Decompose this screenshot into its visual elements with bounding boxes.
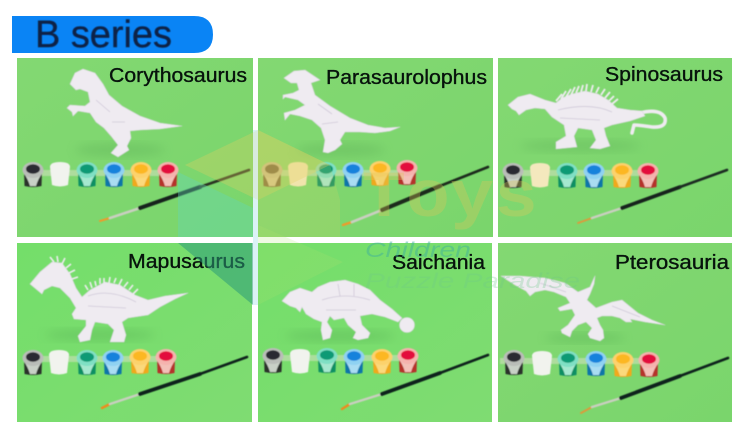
watermark text: Toys: Toys: [362, 161, 538, 236]
header banner: [12, 14, 213, 56]
paint pots: [502, 163, 658, 188]
paint pots: [500, 350, 660, 377]
panel: Parasaurolophus: [258, 58, 493, 237]
label: Saichania: Saichania: [392, 252, 486, 274]
paint pots: [22, 349, 176, 375]
dinosaur figure: Corythosaurus: [67, 69, 182, 157]
label: Corythosaurus: Corythosaurus: [109, 65, 247, 87]
paint pots: [262, 348, 418, 374]
paint brush: [342, 355, 488, 409]
panel: Spinosaurus: [498, 58, 732, 237]
paint pots: [262, 160, 418, 187]
paint brush: [100, 170, 249, 221]
dinosaur figure: Pterosauria: [501, 276, 665, 341]
watermark cube: [178, 130, 343, 305]
watermark text: Children: Children: [365, 239, 471, 262]
dinosaur figure: Parasaurolophus: [283, 70, 400, 153]
dinosaur figure: Mapusaurus: [30, 256, 188, 342]
paint brush: [343, 167, 488, 225]
label: Spinosaurus: Spinosaurus: [605, 64, 723, 86]
panel: Pterosauria: [498, 243, 732, 422]
panel: Saichania: [258, 243, 492, 422]
label: Parasaurolophus: Parasaurolophus: [326, 67, 487, 89]
label: Pterosauria: Pterosauria: [615, 252, 730, 274]
dinosaur figure: Saichania: [282, 280, 414, 340]
panel: Corythosaurus: [17, 58, 253, 237]
paint brush: [102, 357, 247, 408]
paint brush: [578, 170, 727, 223]
dinosaur figure: Spinosaurus: [508, 84, 665, 149]
paint brush: [581, 358, 728, 413]
heading: B series: B series: [35, 14, 172, 56]
panel: Mapusaurus: [17, 243, 252, 422]
watermark: toys logo: [178, 130, 580, 305]
paint pots: [22, 162, 178, 187]
label: Mapusaurus: Mapusaurus: [128, 251, 245, 273]
watermark text: Puzzle Paradise: Puzzle Paradise: [365, 270, 580, 293]
